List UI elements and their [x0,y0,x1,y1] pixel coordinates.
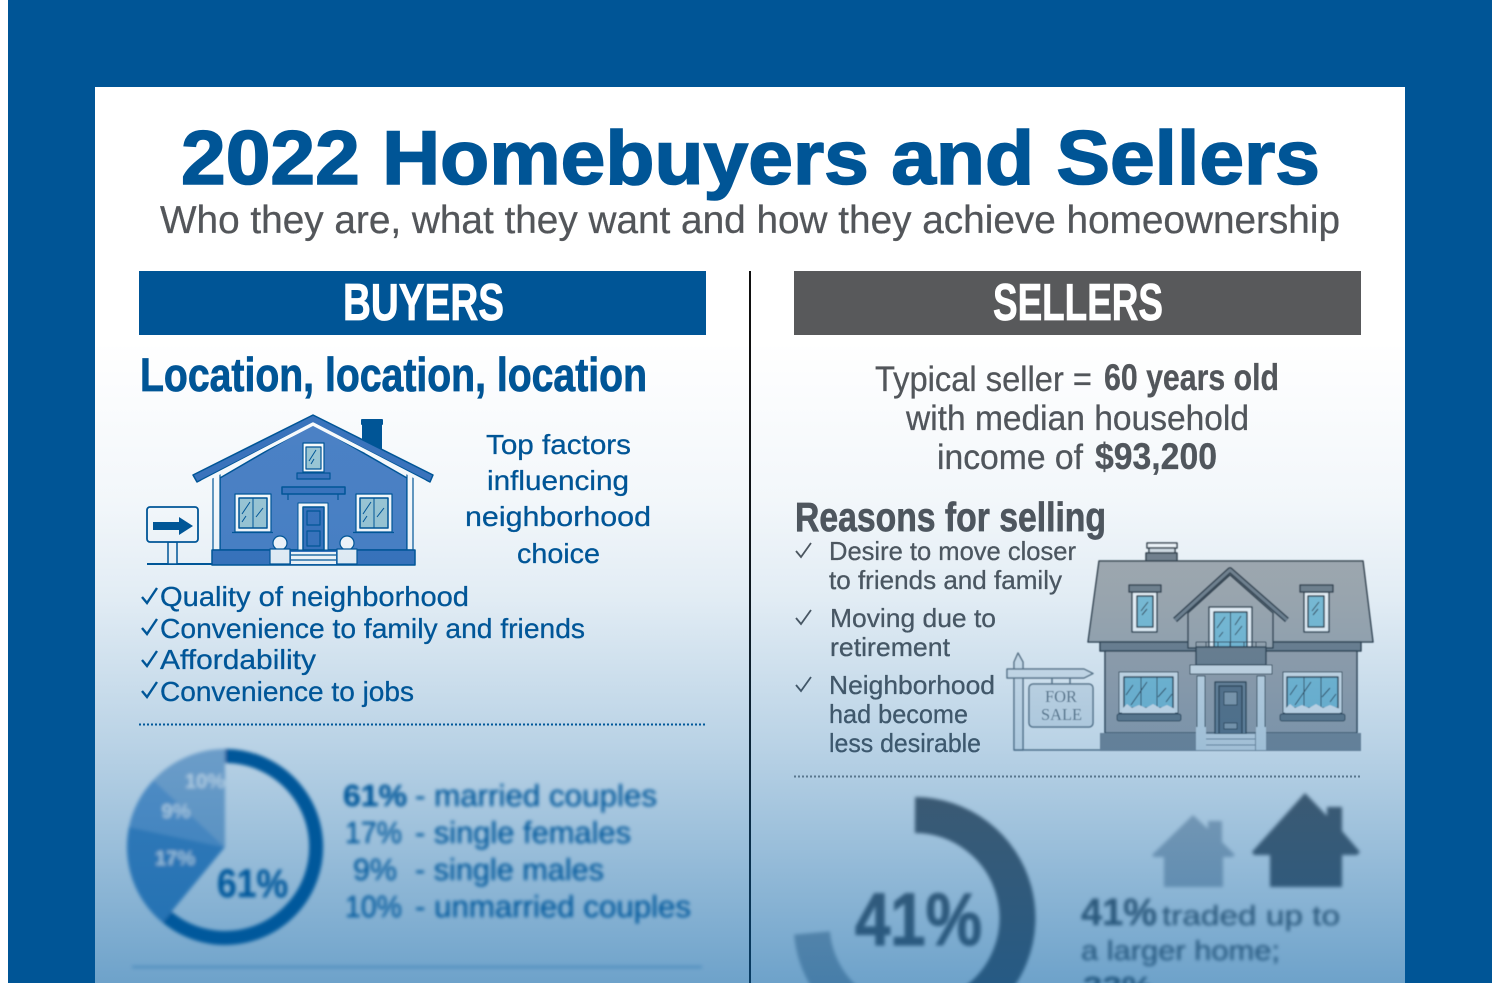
list: neighborhood factors: Convenience to jobs [160,676,414,707]
chart: household pie [127,749,316,938]
list: reasons for selling [796,536,1076,758]
legend: household types: 61% [343,778,407,813]
icon: small house [1152,815,1235,887]
panel: sellers header: SELLERS [993,274,1163,332]
list: neighborhood factors: Affordability [160,644,316,675]
text: typical seller: $93,200 [1095,436,1217,477]
text: traded up [1081,892,1340,983]
subtitle: Who they are, what they want and how they achieve homeownership [160,199,1340,242]
text: typical seller [875,357,1279,477]
legend: household types: 10% [345,889,402,924]
text: traded up: 41% [1081,892,1157,934]
legend: household types: - unmarried couples [415,889,691,924]
list: neighborhood factors: Quality of neighborhood [160,581,469,612]
title: 2022 Homebuyers and Sellers [181,116,1320,201]
list: reasons for selling: had become [829,699,968,729]
text: traded up: traded up to [1162,900,1340,931]
pie label: 61%: 61% [217,862,288,906]
panel: buyers header [139,271,706,335]
icon: grey house with for sale sign [1007,543,1373,751]
pie label: 10%: 10% [185,771,225,793]
text: top factors [465,429,651,569]
text: top factors: influencing [487,465,629,496]
list: neighborhood factors: Convenience to family and friends [160,613,585,644]
chart: 41% donut [812,815,1017,983]
list: reasons for selling: less desirable [829,728,981,758]
legend: household types: - married couples [415,778,657,813]
text: top factors: neighborhood [465,501,651,532]
list: reasons for selling: Moving due to [830,603,996,633]
legend: household types: - single females [415,815,631,850]
text: top factors: Top factors [486,429,631,460]
icon: grey house with for sale sign: FOR [1045,687,1078,706]
panel: sellers header [794,271,1361,335]
text: top factors: choice [517,538,600,569]
icon: grey house with for sale sign: SALE [1041,705,1082,724]
icon: blue house with arrow sign [147,415,433,565]
list: neighborhood factors [142,581,585,707]
text: typical seller: 60 years old [1104,357,1279,398]
text: traded up: a larger home; [1081,935,1280,966]
donut label: 41%: 41% [855,878,982,961]
legend: household types [343,778,691,924]
legend: household types: 9% [353,852,397,887]
list: reasons for selling: retirement [830,632,951,662]
text: typical seller: with median household [905,399,1249,438]
heading: reasons for selling: Reasons for selling [795,494,1106,540]
text: typical seller: income of [937,438,1083,477]
legend: household types: - single males [415,852,604,887]
heading: location: Location, location, location [140,348,647,401]
list: reasons for selling: to friends and family [829,565,1062,595]
list: reasons for selling: Neighborhood [829,670,995,700]
text: typical seller: Typical seller = [875,360,1092,399]
list: reasons for selling: Desire to move closer [829,536,1076,566]
pie label: 17%: 17% [155,848,195,870]
legend: household types: 17% [345,815,402,850]
icon: large house [1252,793,1360,887]
panel: white page [95,87,1405,983]
pie label: 9%: 9% [162,801,191,823]
center divider [749,271,751,983]
panel: buyers header: BUYERS [343,274,504,332]
